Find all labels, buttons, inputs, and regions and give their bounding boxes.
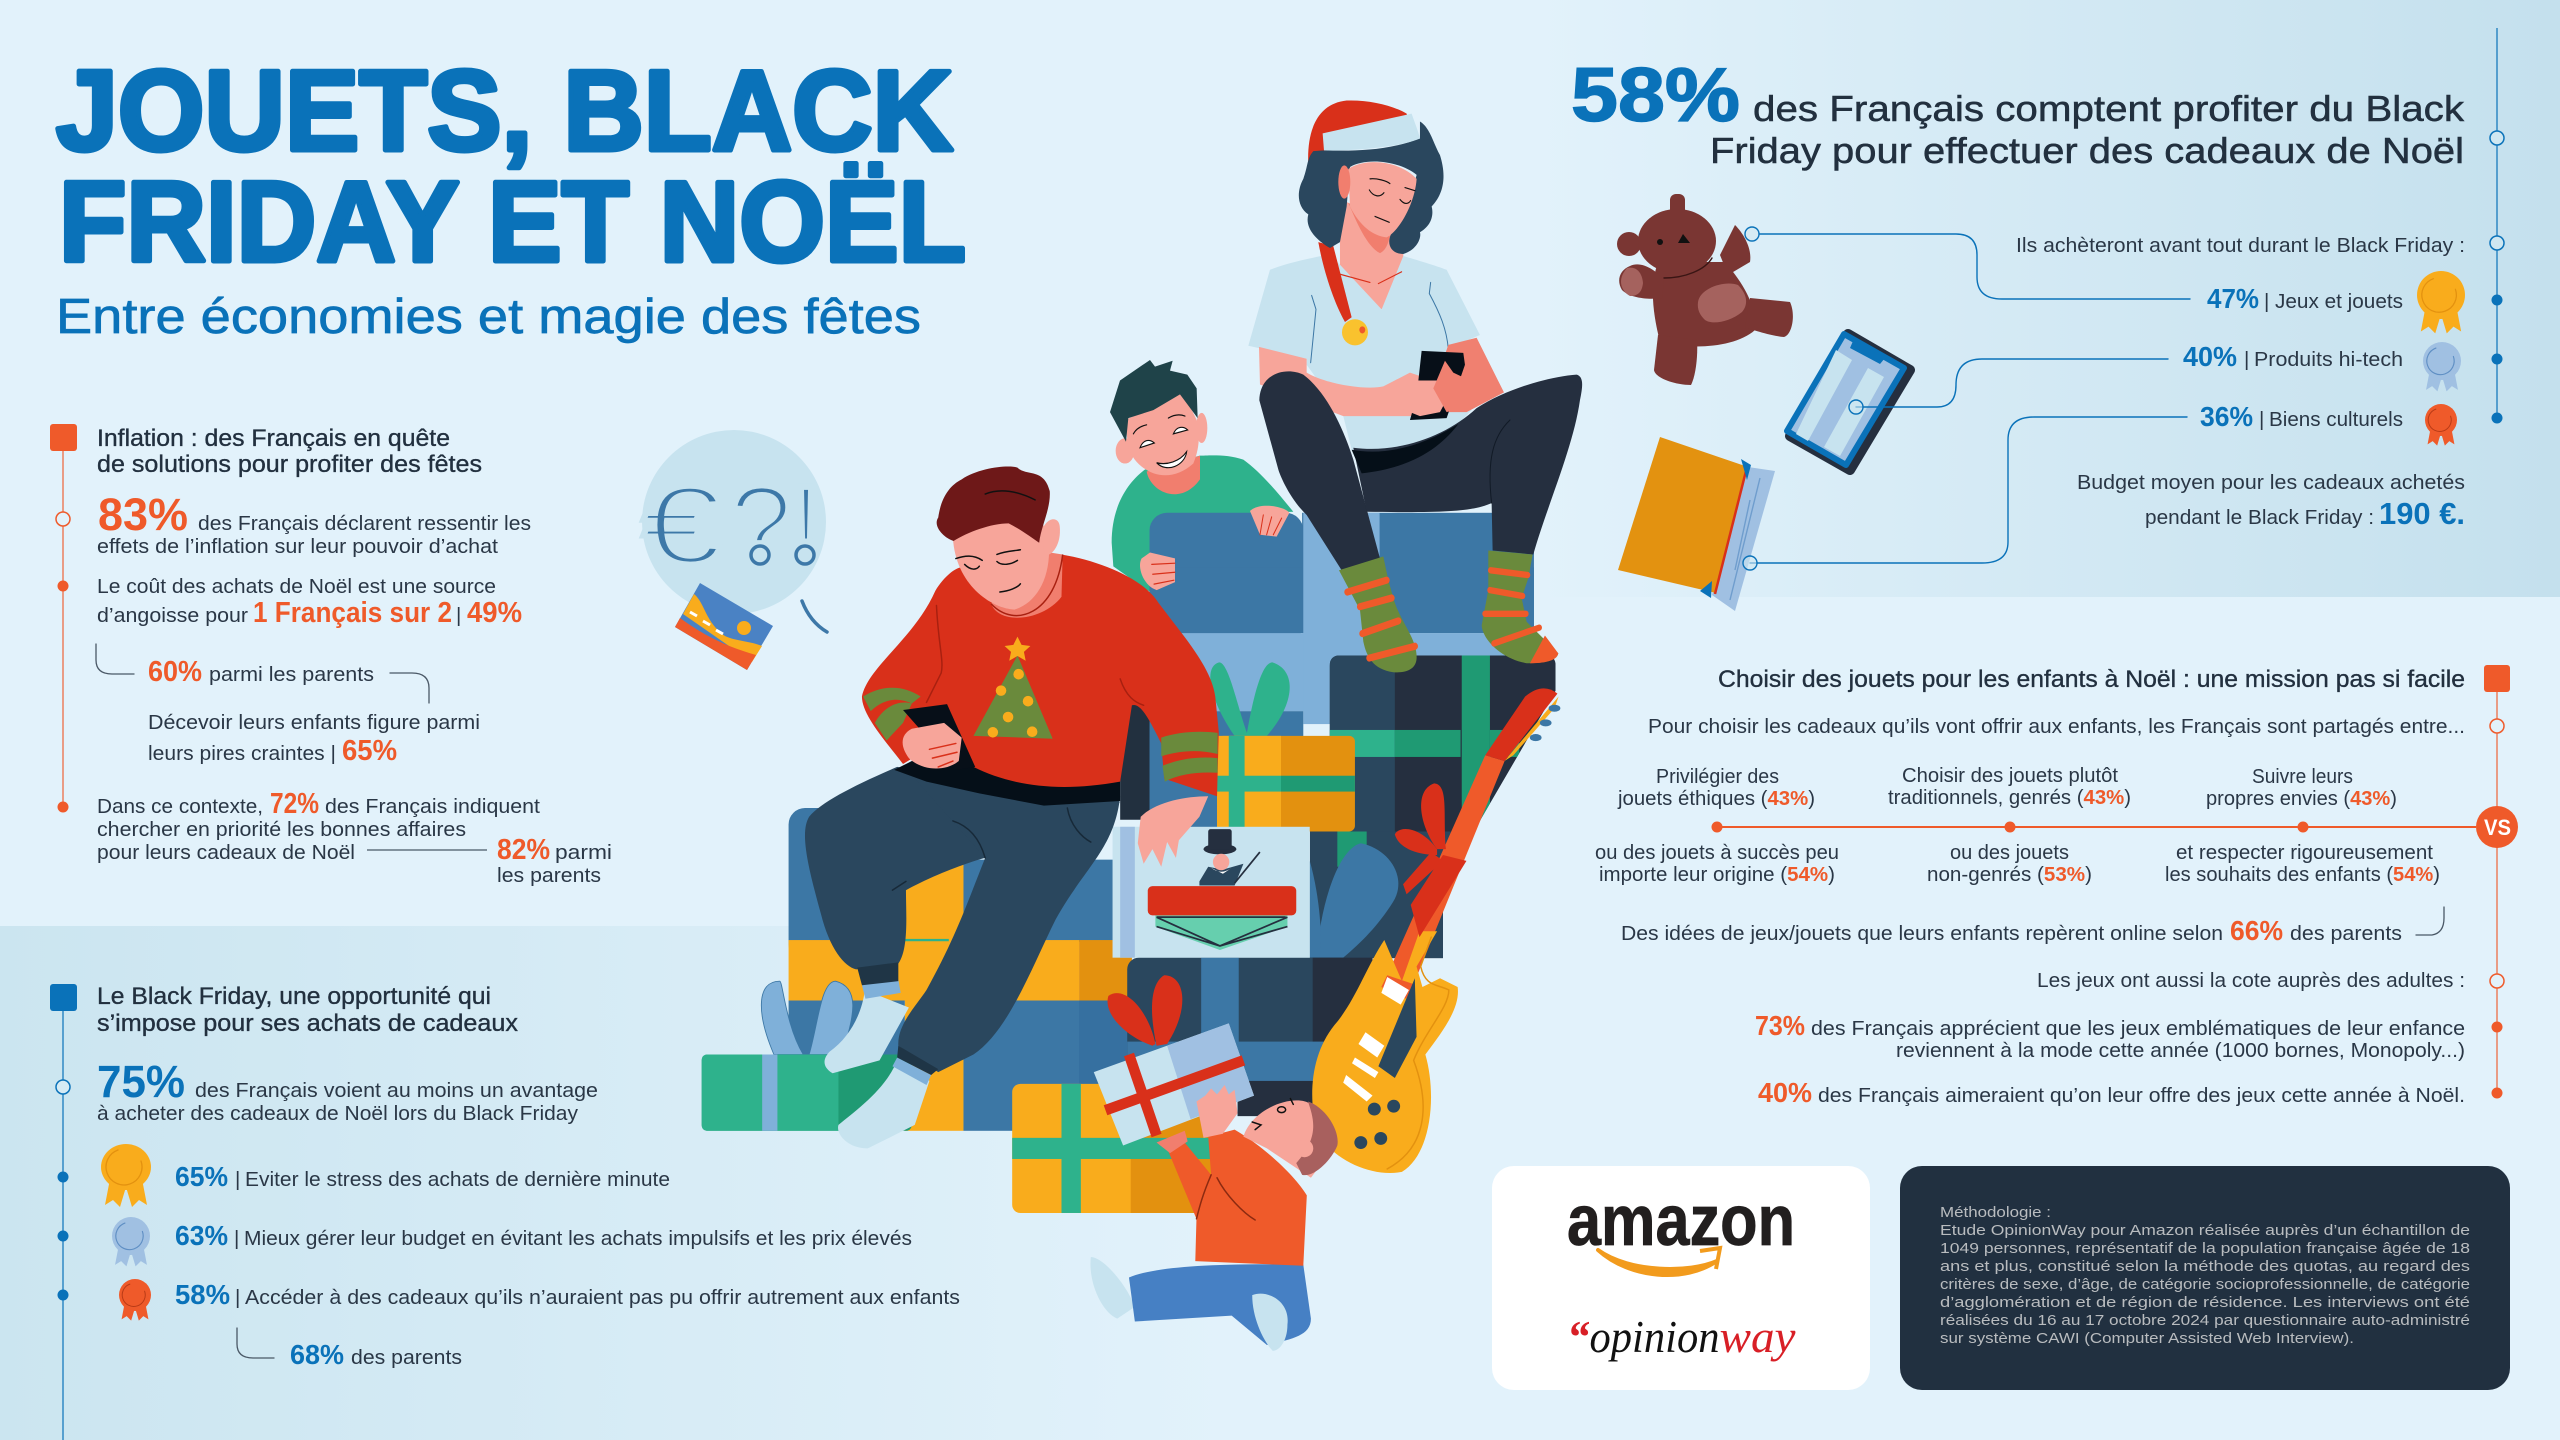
panel: methodology (1900, 1166, 2510, 1390)
gift: top blue box (1120, 513, 1534, 829)
icon: speech bubble with euro sign and credit card: ! (792, 464, 820, 587)
icon: speech bubble with euro sign and credit card (642, 430, 827, 670)
title: JOUETS, BLACK (56, 48, 953, 175)
stat: 47% toys (2207, 283, 2403, 314)
stat: 1 Français sur 2: | (456, 604, 461, 627)
stat: 58%: 58% (175, 1279, 230, 1310)
stat: 47% toys: 47% (2207, 283, 2259, 314)
icon: speech bubble with euro sign and credit card: € (642, 464, 722, 587)
stat: 63%: 63% (175, 1220, 228, 1251)
icon: bronze medal (119, 1279, 151, 1321)
stat: 83%: effets de l’inflation sur leur pouvoir d’achat (97, 535, 498, 558)
stat: 73% (1755, 1010, 2465, 1062)
icon: silver medal (112, 1217, 150, 1266)
title: FRIDAY ET NOËL (59, 159, 966, 286)
panel: Black Friday opportunity (50, 983, 960, 1440)
heading: Black Friday: s’impose pour ses achats de cadeaux (97, 1010, 518, 1037)
stat: 36% culture: Biens culturels (2269, 408, 2403, 431)
panel: upper-right background (1530, 0, 2560, 597)
headline: 58% (1571, 53, 2465, 171)
character: woman with Santa hat (1248, 100, 1582, 672)
stat: 72%: des Français indiquent (325, 795, 540, 818)
text: intro: Ils achèteront avant tout durant le Black Friday : (2016, 234, 2465, 257)
stat: 36% culture: | (2259, 408, 2264, 431)
gift: large blue and yellow box (789, 808, 1151, 1131)
option pair: ethical toys (1595, 765, 1839, 886)
headline: 58%: 58% (1571, 53, 1740, 138)
option pair: wishes: les souhaits des enfants (54%) (2165, 863, 2440, 886)
stat: 1 Français sur 2: d’angoisse pour (97, 604, 248, 627)
text: methodology: sur système CAWI (Computer Assisted Web Interview). (1940, 1331, 2354, 1347)
stat: budget 190 €: pendant le Black Friday : (2145, 506, 2374, 529)
stat: 40% (1758, 1077, 2465, 1108)
stat: 83%: des Français déclarent ressentir les (198, 512, 531, 535)
stat: 66%: Des idées de jeux/jouets que leurs enfants repèrent online selon (1621, 922, 2223, 945)
text: methodology: critères de sexe, d’âge, de catégorie socioprofessionnelle, de catégorie (1940, 1277, 2470, 1293)
stat: 1 Français sur 2: 1 Français sur 2 (253, 597, 452, 629)
icon: teddy bear (1617, 194, 1793, 385)
option pair: wishes (2165, 765, 2440, 886)
stat: 58%: Accéder à des cadeaux qu’ils n’auraient pas pu offrir autrement aux enfants (245, 1286, 960, 1309)
stat: 68%: 68% (290, 1339, 344, 1370)
heading: Black Friday: Le Black Friday, une opportunité qui (97, 983, 491, 1010)
text: methodology: ans et plus, constitué selon la méthode des quotas, au regard des (1940, 1259, 2470, 1275)
stat: 72%: 72% (270, 788, 319, 820)
stat: 65%: | (235, 1168, 240, 1191)
stat: 40%: 40% (1758, 1077, 1812, 1108)
stat: 1 Français sur 2: 49% (467, 597, 522, 629)
stat: 72% (97, 788, 540, 864)
character: boy hands (1140, 506, 1289, 590)
stat: 73%: reviennent à la mode cette année (1000 bornes, Monopoly...) (1896, 1039, 2465, 1062)
stat: 75%: à acheter des cadeaux de Noël lors du Black Friday (97, 1102, 579, 1125)
stat: 58% (175, 1279, 960, 1310)
heading: choosing toys: Choisir des jouets pour les enfants à Noël : une mission pas si facile (1718, 666, 2465, 693)
stat: 63%: Mieux gérer leur budget en évitant les achats impulsifs et les prix élevés (244, 1227, 912, 1250)
stat: 72%: pour leurs cadeaux de Noël (97, 841, 355, 864)
stat: 66%: 66% (2230, 915, 2283, 946)
text: methodology (1940, 1205, 2470, 1347)
icon: book (1618, 437, 1775, 611)
stat: 65%: 65% (175, 1161, 228, 1192)
panel: choosing toys (1595, 665, 2518, 1108)
heading: inflation: de solutions pour profiter des fêtes (97, 451, 482, 478)
chart: versus axis (1712, 806, 2518, 848)
gift: green box with blue bow (702, 981, 912, 1131)
option pair: gendered toys (1888, 764, 2131, 886)
stat: 40% hi-tech: Produits hi-tech (2254, 348, 2403, 371)
text: intro: Pour choisir les cadeaux qu’ils vont offrir aux enfants, les Français sont partagés entre... (1648, 715, 2465, 738)
stat: 68%: des parents (351, 1346, 462, 1369)
option pair: ethical toys: importe leur origine (54%) (1599, 863, 1835, 886)
stat: 65%: 65% (342, 735, 397, 767)
option pair: ethical toys: Privilégier des (1656, 765, 1779, 788)
character: man in Christmas sweater (805, 467, 1219, 1148)
stat: 75% (97, 1056, 598, 1125)
stat: 65%: Eviter le stress des achats de dernière minute (245, 1168, 670, 1191)
icon: orange section marker (50, 424, 77, 451)
character: boy torso and head (1110, 360, 1293, 592)
stat: 65% (175, 1161, 670, 1192)
badge: VS (2476, 806, 2518, 848)
stat: 82%: parmi (555, 841, 612, 864)
stat: 40% hi-tech: 40% (2183, 341, 2237, 372)
stat: 66%: des parents (2290, 922, 2402, 945)
text: methodology: réalisées du 16 au 17 octobre 2024 par questionnaire auto-administré (1940, 1313, 2470, 1329)
option pair: gendered toys: non-genrés (53%) (1927, 863, 2092, 886)
option pair: ethical toys: jouets éthiques (43%) (1617, 787, 1815, 810)
illustration: family and gifts (702, 100, 1582, 1351)
gift: dark centre box (1127, 958, 1373, 1116)
stat: 72%: chercher en priorité les bonnes affaires (97, 818, 466, 841)
text: methodology: 1049 personnes, représentatif de la population française âgée de 18 (1940, 1241, 2470, 1257)
character: baby with gift (1090, 975, 1338, 1351)
icon: speech bubble with euro sign and credit card: ? (730, 464, 792, 587)
stat: 75%: des Français voient au moins un avantage (195, 1079, 598, 1102)
stat: budget 190 €: Budget moyen pour les cadeaux achetés (2077, 471, 2465, 494)
stat: 82%: 82% (497, 834, 550, 866)
panel: lower-left background (0, 926, 1240, 1440)
stat: 36% culture: 36% (2200, 401, 2253, 432)
game: Monopoly box (1113, 827, 1310, 958)
option pair: ethical toys: ou des jouets à succès peu (1595, 841, 1839, 864)
object: guitar (1312, 688, 1560, 1173)
stat: 60% parents: 60% (148, 656, 202, 688)
gift: bottom yellow box (1012, 1084, 1220, 1213)
icon: silver medal (2423, 342, 2461, 391)
icon: phone (1787, 334, 1910, 470)
stat: 73%: 73% (1755, 1010, 1805, 1041)
option pair: gendered toys: traditionnels, genrés (43%) (1888, 786, 2131, 809)
stat: budget 190 € (2077, 471, 2465, 531)
stat: 1 Français sur 2 (97, 575, 522, 629)
stat: 58%: | (235, 1286, 240, 1309)
logo: opinionway: “opinionway (1567, 1312, 1796, 1362)
stat: 40%: des Français aimeraient qu’on leur offre des jeux cette année à Noël. (1818, 1084, 2465, 1107)
gift boxes stack (702, 513, 1556, 1213)
option pair: wishes: et respecter rigoureusement (2176, 841, 2433, 864)
option pair: wishes: Suivre leurs (2252, 765, 2353, 788)
stat: 66% (1621, 915, 2402, 946)
text: adults: Les jeux ont aussi la cote auprès des adultes : (2037, 969, 2465, 992)
stat: 65% (148, 711, 480, 767)
panel: logos (1492, 1166, 1870, 1390)
panel: purchases during Black Friday (1617, 28, 2504, 611)
option pair: gendered toys: Choisir des jouets plutôt (1902, 764, 2118, 787)
stat: 40% hi-tech: | (2244, 348, 2249, 371)
stat: 40% hi-tech (2183, 341, 2403, 372)
stat: 72%: Dans ce contexte, (97, 795, 263, 818)
icon: gold medal (101, 1144, 151, 1207)
stat: 65%: leurs pires craintes | (148, 742, 336, 765)
stat: 82% (497, 834, 612, 887)
logo: amazon: amazon (1567, 1182, 1795, 1261)
badge: VS: VS (2484, 815, 2511, 840)
stat: 83%: 83% (98, 489, 188, 540)
stat: 60% parents (148, 656, 374, 688)
stat: 83% (97, 489, 531, 558)
stat: 63%: | (234, 1227, 239, 1250)
text: methodology: d’agglomération et de région de résidence. Les interviews ont été (1940, 1295, 2470, 1311)
gift: yellow box with green bow (1210, 662, 1355, 831)
stat: 73%: des Français apprécient que les jeux emblématiques de leur enfance (1811, 1017, 2465, 1040)
option pair: gendered toys: ou des jouets (1950, 841, 2069, 864)
headline: 58%: Friday pour effectuer des cadeaux de Noël (1710, 130, 2464, 171)
icon: gold medal (2417, 271, 2465, 333)
heading: inflation: Inflation : des Français en quête (97, 425, 450, 452)
text: methodology: Etude OpinionWay pour Amazon réalisée auprès d’un échantillon de (1940, 1223, 2470, 1239)
stat: 60% parents: parmi les parents (209, 663, 374, 686)
stat: 63% (175, 1220, 912, 1251)
stat: 82%: les parents (497, 864, 601, 887)
stat: 47% toys: Jeux et jouets (2275, 290, 2403, 313)
stat: 1 Français sur 2: Le coût des achats de Noël est une source (97, 575, 496, 598)
gift: dark box right (1310, 655, 1556, 961)
heading: inflation (97, 425, 482, 478)
stat: budget 190 €: 190 €. (2379, 496, 2465, 531)
heading: Black Friday (97, 983, 518, 1037)
stat: 36% culture (2200, 401, 2403, 432)
icon: orange section marker (2484, 665, 2510, 692)
headline: 58%: des Français comptent profiter du Black (1753, 88, 2465, 129)
stat: 65%: Décevoir leurs enfants figure parmi (148, 711, 480, 734)
icon: bronze medal (2425, 404, 2457, 446)
stat: 75%: 75% (97, 1056, 185, 1107)
title (56, 48, 966, 286)
subtitle: Entre économies et magie des fêtes (56, 290, 921, 344)
icon: blue section marker (50, 984, 77, 1011)
panel: inflation (50, 424, 612, 887)
stat: 68% (290, 1339, 462, 1370)
option pair: wishes: propres envies (43%) (2206, 787, 2397, 810)
text: methodology: Méthodologie : (1940, 1205, 2051, 1221)
stat: 47% toys: | (2264, 290, 2269, 313)
